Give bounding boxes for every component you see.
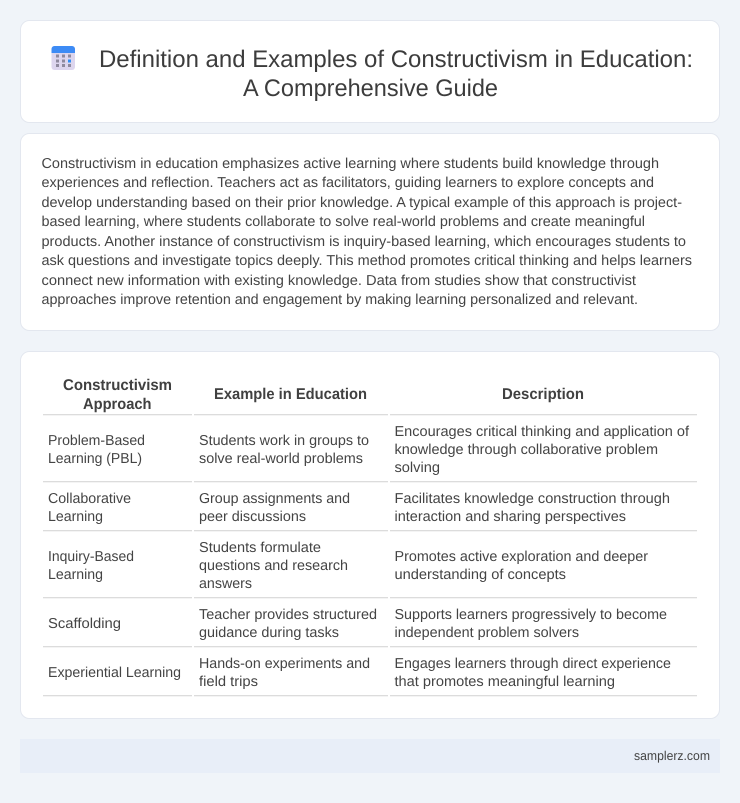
icon: calendar — [52, 46, 75, 70]
panel: title card — [20, 20, 720, 122]
text block: intro paragraph: based learning, where students collaborate to solve real-world problems and create meaningful — [42, 214, 645, 230]
table row: Experiential Learning: Experiential Learning — [48, 665, 181, 681]
text block: intro paragraph: experiences and reflection. Teachers act as facilitators, guiding learners to explore concepts and — [42, 175, 654, 191]
table row: Experiential Learning: Engages learners through direct experience — [394, 656, 671, 672]
title: Definition and Examples of Constructivism in Education: — [99, 46, 693, 73]
table row: Problem-Based Learning: solve real-world problems — [199, 451, 363, 467]
text block: intro paragraph: Constructivism in education emphasizes active learning where students build knowledge through — [42, 156, 659, 172]
table row: Collaborative Learning: Group assignments and — [199, 491, 350, 507]
table row: Problem-Based Learning: Learning (PBL) — [48, 451, 142, 467]
table row: Collaborative Learning: Learning — [48, 509, 103, 525]
text block: intro paragraph: approaches improve retention and engagement by making learning personalized and relevant. — [42, 292, 638, 308]
table row: Problem-Based Learning: Students work in groups to — [199, 433, 369, 449]
table row: Inquiry-Based Learning: understanding of concepts — [394, 567, 566, 583]
table row: Inquiry-Based Learning: questions and research — [199, 558, 348, 574]
table row: Inquiry-Based Learning: Promotes active exploration and deeper — [394, 549, 648, 565]
table header row — [63, 377, 584, 413]
text block: intro paragraph — [42, 156, 692, 308]
table row: Inquiry-Based Learning — [48, 540, 648, 592]
table row: Scaffolding: Scaffolding — [48, 616, 121, 632]
table row: Collaborative Learning: interaction and sharing perspectives — [394, 509, 626, 525]
table row: Experiential Learning: Hands-on experiments and — [199, 656, 370, 672]
table row: Scaffolding: independent problem solvers — [394, 625, 579, 641]
footer source text: samplerz.com — [634, 748, 710, 763]
table row: Scaffolding: Teacher provides structured — [199, 607, 377, 623]
text block: intro paragraph: products. Another instance of constructivism is inquiry-based learning, which encourages students to — [42, 234, 686, 250]
table row: Inquiry-Based Learning: Learning — [48, 567, 103, 583]
table row: Collaborative Learning: Collaborative — [48, 491, 131, 507]
text block: intro paragraph: develop understanding based on their prior knowledge. A typical example of this approach is project- — [42, 195, 682, 211]
text block: intro paragraph: ask questions and investigate topics deeply. This method promotes critical thinking and helps learners — [42, 253, 692, 269]
table row: Problem-Based Learning: Encourages critical thinking and application of — [394, 424, 690, 440]
table row: Experiential Learning — [48, 656, 671, 690]
table row: Problem-Based Learning: solving — [394, 460, 440, 476]
table row: Experiential Learning: field trips — [199, 674, 258, 690]
title: A Comprehensive Guide — [243, 75, 498, 102]
title — [99, 46, 693, 102]
table row: Inquiry-Based Learning: answers — [199, 576, 252, 592]
table header row: Example in Education — [214, 386, 367, 403]
table header row: Description — [502, 386, 584, 403]
table row: Scaffolding: guidance during tasks — [199, 625, 339, 641]
table row: Inquiry-Based Learning: Students formulate — [199, 540, 321, 556]
table row: Problem-Based Learning: Problem-Based — [48, 433, 145, 449]
table row: Collaborative Learning: peer discussions — [199, 509, 306, 525]
text block: intro paragraph: connect new information with existing knowledge. Data from studies show that constructivist — [42, 273, 636, 289]
table header row: Approach — [83, 396, 152, 413]
table row: Collaborative Learning — [48, 491, 670, 525]
table row: Scaffolding: Supports learners progressively to become — [394, 607, 667, 623]
table row: Scaffolding — [48, 607, 667, 641]
table header row: Constructivism — [63, 377, 172, 394]
table row: Experiential Learning: that promotes meaningful learning — [394, 674, 615, 690]
footer bar — [20, 739, 720, 773]
table row: Problem-Based Learning — [48, 424, 690, 476]
table row: Collaborative Learning: Facilitates knowledge construction through — [394, 491, 670, 507]
panel: comparison table card — [20, 352, 720, 718]
panel: intro text card — [20, 134, 720, 330]
table row: Problem-Based Learning: knowledge through collaborative problem — [394, 442, 658, 458]
table row: Inquiry-Based Learning: Inquiry-Based — [48, 549, 134, 565]
